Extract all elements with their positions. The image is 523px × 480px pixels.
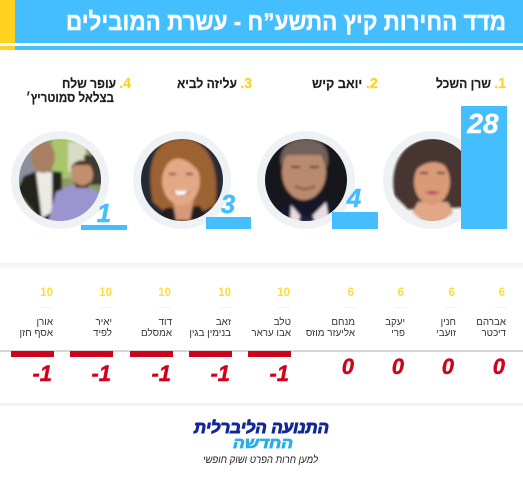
- column: Menachem Eliezer Moses: מנחם: [331, 317, 355, 328]
- logo: New Liberal Movement: [193, 419, 329, 466]
- column: Yaakov Peri: 0: [392, 354, 405, 379]
- rank 4 name: [26, 75, 132, 105]
- column: Yaakov Peri: יעקב: [385, 317, 405, 328]
- bar: 3: [206, 189, 251, 229]
- column: Taleb Abu Arar: טלב: [274, 316, 291, 328]
- photo: Ofer Shelah and Bezalel Smotrich: [11, 131, 109, 229]
- column: David Amsalem: דוד: [159, 317, 173, 328]
- column: Hanin Zoabi: 0: [442, 354, 455, 379]
- rank 3 name: 3. עליזה לביא: [177, 75, 252, 92]
- bar: 1: [81, 198, 127, 230]
- logo: New Liberal Movement: למען חרות הפרט ושוק חופשי: [203, 454, 318, 466]
- column: David Amsalem: 10: [158, 287, 171, 299]
- column: Ze'ev Binyamin Begin: בנימין בגין: [189, 328, 231, 339]
- header band: [0, 0, 523, 50]
- column: David Amsalem: [130, 287, 173, 386]
- bar: 3: 3: [221, 189, 236, 219]
- column: Oren Asaf Hazan: אורן: [37, 317, 54, 328]
- column: Yair Lapid: -1: [91, 361, 111, 386]
- rank 2 name: 2. יואב קיש: [312, 75, 378, 92]
- column: Ze'ev Binyamin Begin: זאב: [216, 317, 232, 328]
- column: Hanin Zoabi: 6: [449, 287, 455, 299]
- column: Taleb Abu Arar: אבו עראר: [251, 328, 292, 339]
- column: Avraham Dichter: 0: [493, 354, 506, 379]
- column: Yaakov Peri: [385, 287, 406, 379]
- column: Avraham Dichter: דיכטר: [481, 328, 507, 339]
- bar: 28: 28: [466, 108, 499, 139]
- column: David Amsalem: -1: [151, 361, 171, 386]
- column: David Amsalem: אמסלם: [141, 327, 173, 339]
- photo: Sharren Haskel: [383, 131, 461, 229]
- logo: New Liberal Movement: התנועה הליברלית: [193, 419, 329, 437]
- column: Taleb Abu Arar: -1: [269, 361, 289, 386]
- column: Yaakov Peri: פרי: [391, 328, 405, 339]
- column: Hanin Zoabi: חנין: [441, 317, 456, 328]
- column: Ze'ev Binyamin Begin: 10: [218, 287, 231, 299]
- column: Menachem Eliezer Moses: 0: [342, 354, 355, 379]
- column: Hanin Zoabi: [436, 287, 457, 379]
- photo: Aliza Lavie: [133, 131, 231, 229]
- section shadows: [0, 263, 523, 408]
- baseline: [0, 350, 523, 352]
- column: Oren Asaf Hazan: אסף חזן: [20, 328, 54, 339]
- rank 1 name: 1. שרן השכל: [436, 75, 506, 92]
- column: Oren Asaf Hazan: -1: [32, 361, 52, 386]
- column: Avraham Dichter: [476, 287, 507, 379]
- column: Yair Lapid: 10: [99, 287, 112, 299]
- column: Hanin Zoabi: זועבי: [436, 328, 457, 339]
- logo: New Liberal Movement: החדשה: [233, 435, 293, 452]
- column: Yair Lapid: לפיד: [93, 327, 112, 339]
- column: Menachem Eliezer Moses: [306, 287, 356, 379]
- rank 4 name: 4. עופר שלח: [62, 75, 132, 92]
- column: Ze'ev Binyamin Begin: [189, 287, 232, 386]
- column: Menachem Eliezer Moses: 6: [348, 287, 354, 299]
- rank 4 name: בצלאל סמוטריץ׳: [26, 90, 114, 105]
- column: Avraham Dichter: 6: [499, 287, 505, 299]
- column: Oren Asaf Hazan: 10: [40, 287, 53, 299]
- column: Oren Asaf Hazan: [11, 287, 54, 386]
- column: Taleb Abu Arar: [248, 287, 292, 386]
- column: Yaakov Peri: 6: [398, 287, 404, 299]
- bar: 4: 4: [346, 183, 362, 213]
- photo: Yoav Kisch: [257, 131, 355, 229]
- column: Ze'ev Binyamin Begin: -1: [210, 361, 230, 386]
- column: Yair Lapid: [70, 287, 113, 386]
- column: Taleb Abu Arar: 10: [277, 287, 290, 299]
- column: Avraham Dichter: אברהם: [476, 317, 507, 328]
- column: Yair Lapid: יאיר: [96, 317, 112, 328]
- column: Menachem Eliezer Moses: אליעזר מוזס: [306, 327, 356, 339]
- bar: 28: [461, 106, 507, 229]
- bar: 1: 1: [97, 198, 111, 228]
- bar: 4: [332, 183, 378, 229]
